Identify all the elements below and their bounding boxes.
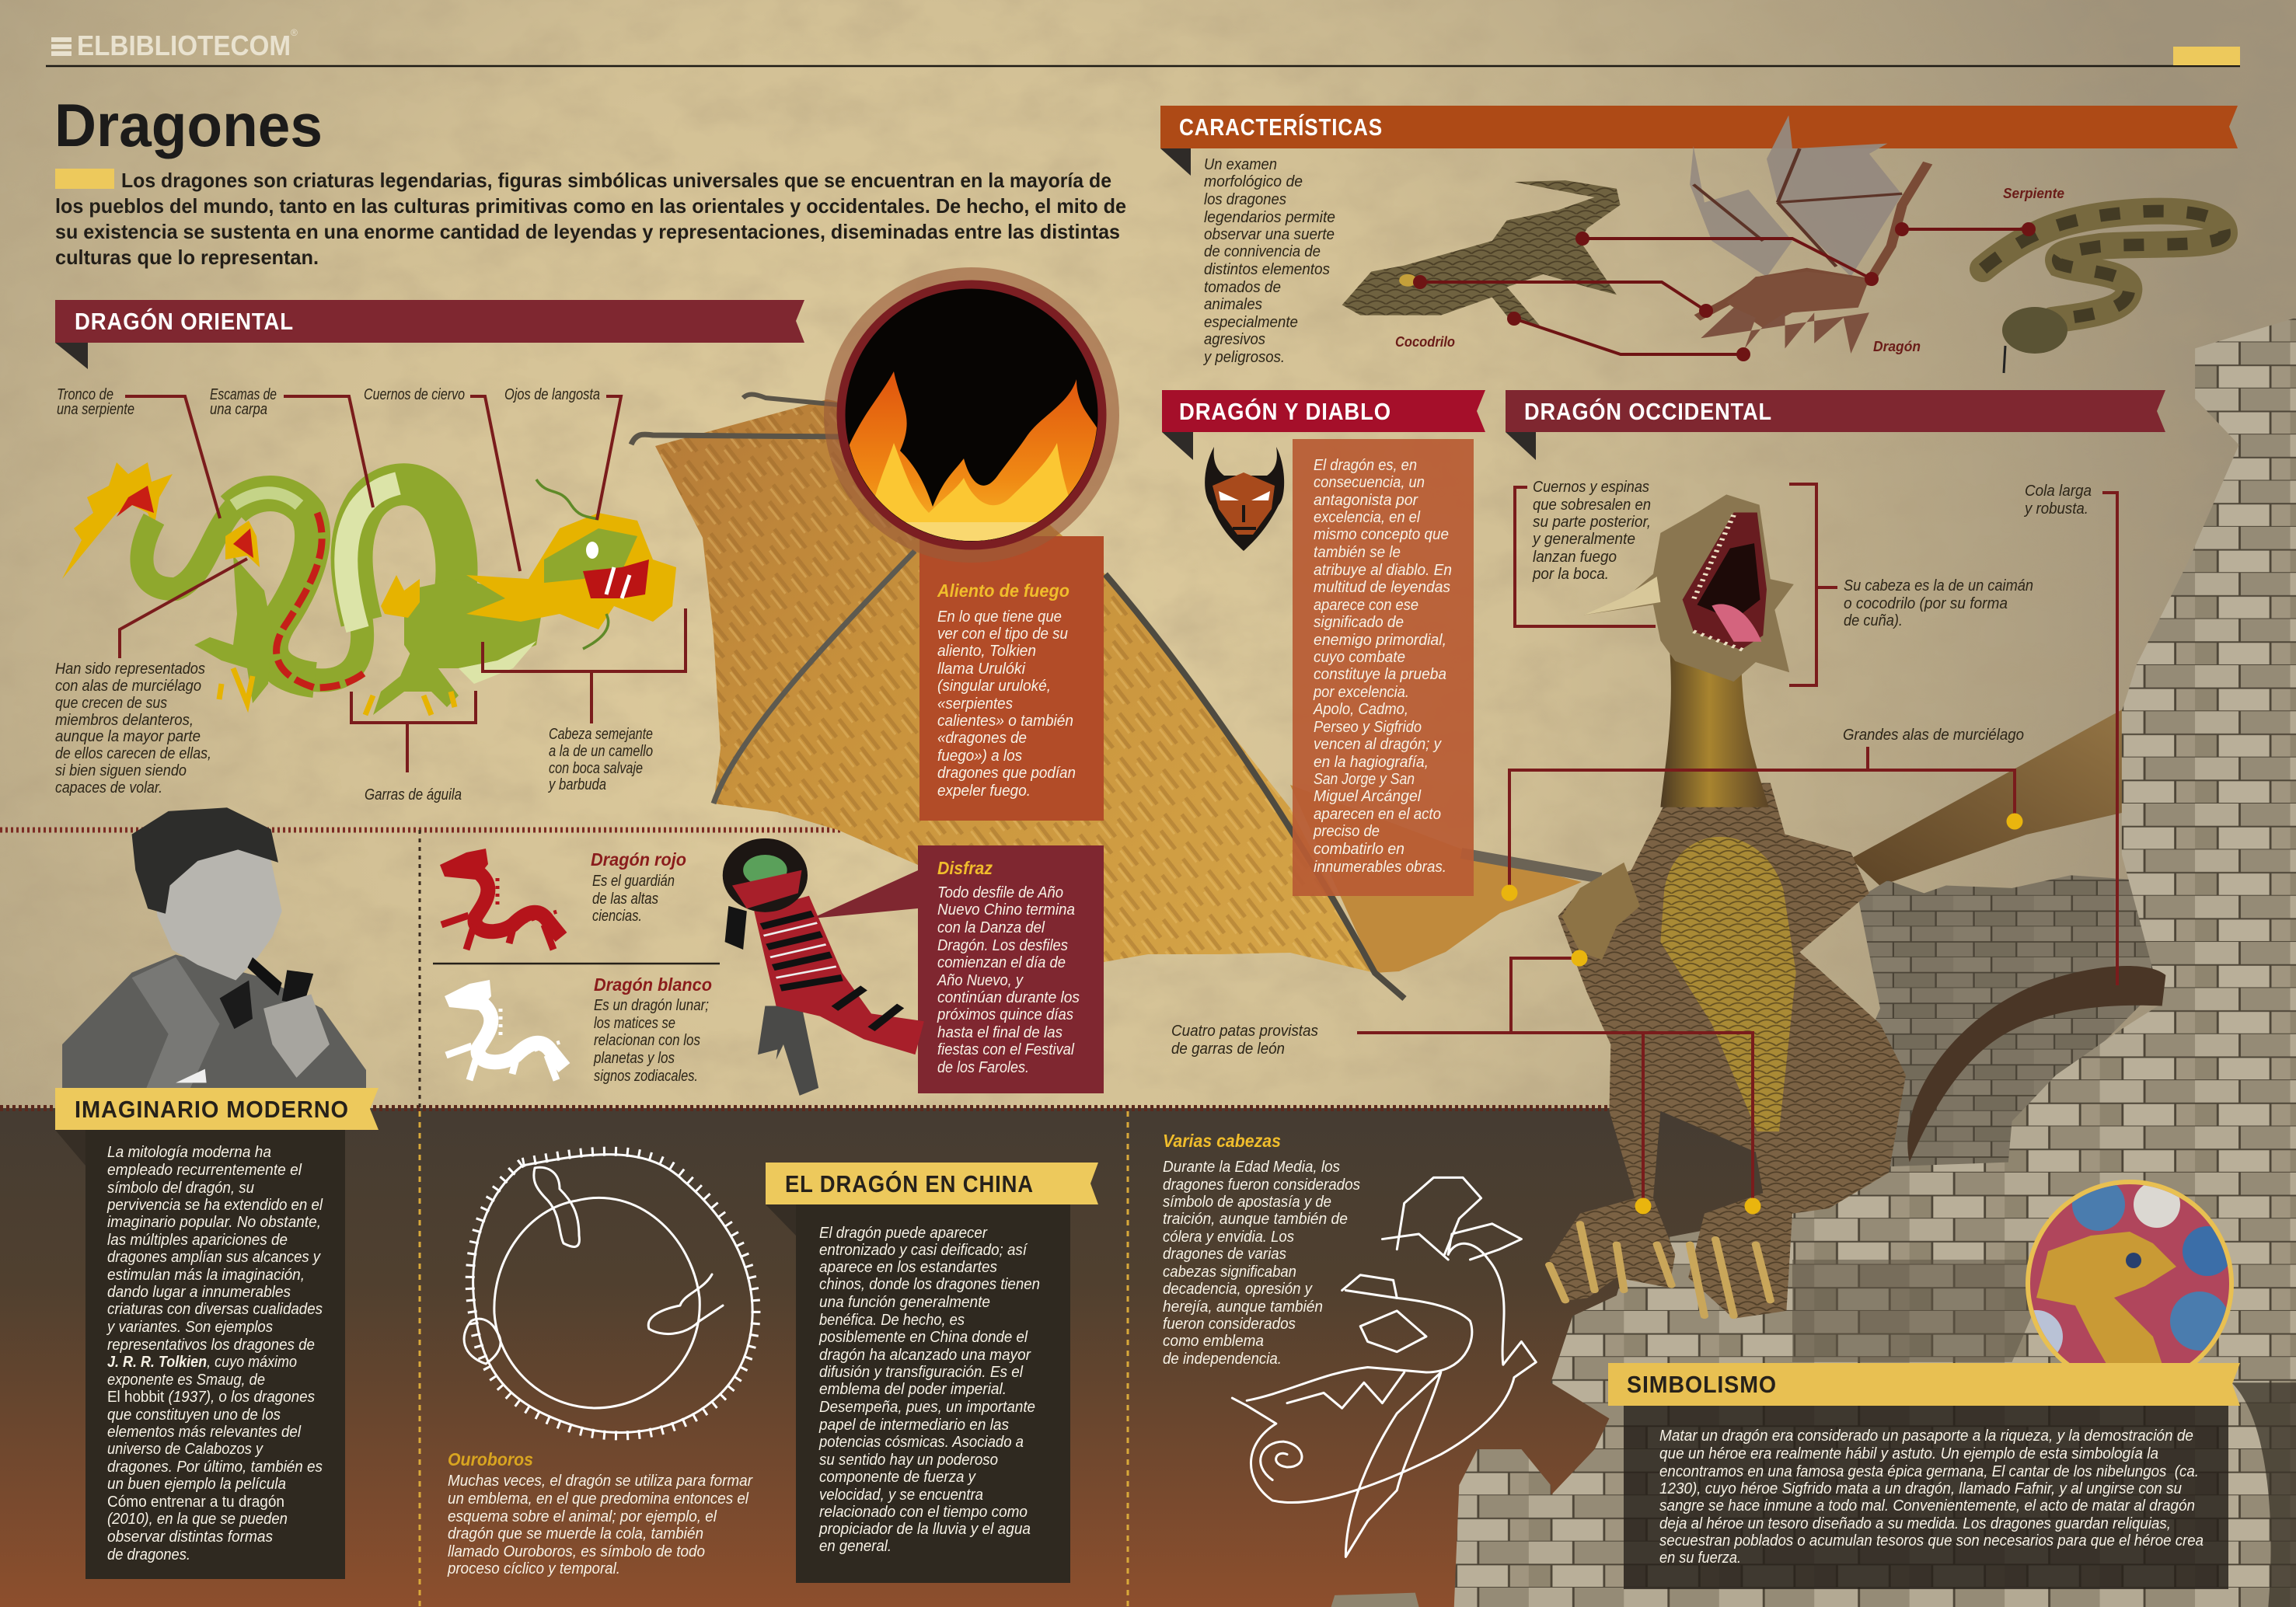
banner and box: imaginario moderno: J. R. R. Tolkien, cuyo máximo <box>107 1354 297 1371</box>
panel: dragón y diablo: por excelencia. <box>1313 684 1409 701</box>
panel: disfraz: de los Faroles. <box>937 1059 1029 1076</box>
panel: aliento de fuego: ver con el tipo de su <box>937 626 1068 643</box>
características text: animales <box>1204 296 1262 313</box>
oriental dragon callouts: Cuernos de ciervo <box>364 386 465 403</box>
panel: aliento de fuego: Aliento de fuego <box>937 580 1069 601</box>
banner and box: el dragón en china: en general. <box>819 1538 892 1555</box>
panel: dragón y diablo: DRAGÓN Y DIABLO <box>1179 397 1391 425</box>
tail <box>1907 966 2165 1163</box>
varias cabezas text: cólera y envidia. Los <box>1163 1229 1294 1246</box>
banner and box: imaginario moderno: (2010), en la que se pueden <box>107 1511 288 1528</box>
banner and box: imaginario moderno: las múltiples apariciones de <box>107 1232 288 1249</box>
características leader lines <box>1395 186 2064 361</box>
panel: dragón y diablo: innumerables obras. <box>1314 859 1446 876</box>
banner and box: simbolismo <box>1608 1178 2240 1589</box>
panel: dragón y diablo: San Jorge y San <box>1314 771 1415 788</box>
panel: aliento de fuego: dragones que podían <box>937 765 1076 782</box>
panel: disfraz: hasta el final de las <box>937 1024 1063 1041</box>
panel: dark lower band <box>0 1108 2296 1607</box>
logo: ELBIBLIOTECOM <box>77 30 291 61</box>
western dragon callouts: o cocodrilo (por su forma <box>1844 595 2008 612</box>
banner and box: el dragón en china: componente de fuerza y <box>819 1469 976 1486</box>
panel: dragón y diablo: Perseo y Sigfrido <box>1314 719 1422 736</box>
western dragon callouts <box>1171 479 2117 1214</box>
características text: morfológico de <box>1204 173 1303 190</box>
fire halo and ring <box>824 267 1119 563</box>
raised claw <box>1561 863 1640 960</box>
page tab <box>2173 47 2240 65</box>
right wing <box>1851 699 2176 886</box>
banner and box: simbolismo: sangre se hace inmune a todo mal. Convenientemente, el acto de matar al dragón <box>1659 1497 2195 1515</box>
oriental dragon callouts: una carpa <box>210 401 267 418</box>
wall shade <box>1792 1260 2056 1362</box>
red dragon icon <box>440 849 561 950</box>
dragon types text: Dragón blanco <box>594 974 712 995</box>
banner and box: el dragón en china: entronizado y casi deificado; así <box>819 1242 1028 1259</box>
banner and box: imaginario moderno: criaturas con diversas cualidades <box>107 1301 323 1318</box>
photo: Tolkien <box>62 807 366 1088</box>
castle masonry <box>1331 318 2296 1607</box>
banner and box: el dragón en china: posiblemente en China donde el <box>818 1329 1028 1346</box>
banner and box: el dragón en china: su sentido hay un poderoso <box>819 1452 998 1469</box>
western dragon callouts: por la boca. <box>1532 566 1609 583</box>
ouroboros illustration <box>464 1152 755 1435</box>
oriental dragon callouts: que crecen de sus <box>55 695 167 712</box>
características text: agresivos <box>1204 331 1265 348</box>
legs and claws <box>194 556 272 703</box>
western dragon callouts: Cuatro patas provistas <box>1171 1023 1318 1040</box>
intro text: culturas que lo representan. <box>55 246 319 269</box>
medallion <box>2026 1180 2234 1363</box>
varias cabezas text: como emblema <box>1163 1333 1264 1350</box>
oriental dragon callouts: Ojos de langosta <box>504 386 600 403</box>
banner and box: simbolismo: Matar un dragón era considerado un pasaporte a la riqueza, y la demostración de <box>1659 1427 2193 1445</box>
varias cabezas text: Durante la Edad Media, los <box>1163 1159 1340 1176</box>
características text: especialmente <box>1204 314 1298 331</box>
panel: dragón y diablo: excelencia, en el <box>1314 509 1421 526</box>
banner and box: imaginario moderno: universo de Calabozos y <box>107 1441 263 1458</box>
panel: dragón y diablo: combatirlo en <box>1314 841 1404 858</box>
varias cabezas text: símbolo de apostasía y de <box>1163 1194 1331 1211</box>
varias cabezas text: decadencia, opresión y <box>1163 1281 1313 1298</box>
panel: disfraz: Dragón. Los desfiles <box>937 937 1068 954</box>
características text: los dragones <box>1204 191 1286 208</box>
banner and box: el dragón en china: El dragón puede aparecer <box>819 1225 988 1242</box>
body <box>141 484 456 680</box>
icon: devil head <box>1205 447 1284 551</box>
western dragon callouts: que sobresalen en <box>1533 497 1651 514</box>
banner and box: imaginario moderno: pervivencia se ha extendido en el <box>106 1197 323 1214</box>
panel: dragón y diablo <box>1162 390 1485 896</box>
dragon types text: los matices se <box>594 1015 675 1032</box>
banner: características: CARACTERÍSTICAS <box>1179 113 1383 141</box>
oriental dragon callouts: y barbuda <box>547 776 606 793</box>
western dragon callouts: de cuña). <box>1844 612 1903 629</box>
intro text: los pueblos del mundo, tanto en las culturas primitivas como en las orientales y occidentales. De hecho, el mito de <box>55 194 1126 218</box>
banner and box: imaginario moderno: símbolo del dragón, su <box>107 1180 254 1197</box>
banner and box: simbolismo: 1230), cuyo héroe Sigfrido mata a un dragón, llamado Fafnir, y al ungirse con su <box>1659 1480 2182 1497</box>
ouroboros text: Muchas veces, el dragón se utiliza para formar <box>448 1473 753 1490</box>
western dragon callouts: su parte posterior, <box>1533 514 1651 531</box>
banner and box: simbolismo: deja al héroe un tesoro diseñado a su medida. Los dragones guardan reliquias, <box>1659 1515 2171 1532</box>
características text: de connivencia de <box>1204 243 1321 260</box>
panel: dragón y diablo: enemigo primordial, <box>1314 632 1446 649</box>
banner and box: imaginario moderno: dragones. Por último, también es <box>107 1459 323 1476</box>
dragon types text: de las altas <box>592 891 658 908</box>
panel: disfraz: con la Danza del <box>937 919 1045 936</box>
panel: disfraz: fiestas con el Festival <box>937 1041 1075 1058</box>
banner: dragón oriental: DRAGÓN ORIENTAL <box>75 307 294 335</box>
ouroboros text: Ouroboros <box>448 1449 533 1469</box>
panel: dragón y diablo: mismo concepto que <box>1314 526 1449 543</box>
oriental dragon callouts: Garras de águila <box>365 786 462 804</box>
banner and box: imaginario moderno: exponente es Smaug, de <box>107 1372 265 1389</box>
panel: aliento de fuego: «dragones de <box>937 730 1027 747</box>
panel: aliento de fuego <box>824 267 1119 821</box>
características leader lines: Serpiente <box>2003 186 2064 201</box>
banner and box: el dragón en china: potencias cósmicas. Asociado a <box>818 1434 1024 1451</box>
oriental dragon callouts: con boca salvaje <box>549 760 643 777</box>
small ruin <box>1454 1449 1555 1607</box>
banner and box: imaginario moderno: Cómo entrenar a tu dragón <box>107 1494 284 1511</box>
varias cabezas text: cabezas significaban <box>1163 1264 1296 1281</box>
banner and box: imaginario moderno: empleado recurrentemente el <box>107 1162 302 1179</box>
varias cabezas text <box>1163 1131 1360 1368</box>
panel: dragón y diablo: también se le <box>1314 544 1401 561</box>
dragon types text: Es un dragón lunar; <box>594 997 709 1014</box>
oriental dragon callouts: a la de un camello <box>549 743 653 760</box>
dragon types text: Es el guardián <box>592 873 675 890</box>
panel: disfraz: Disfraz <box>937 858 993 878</box>
banner and box: imaginario moderno: que constituyen uno de los <box>107 1407 281 1424</box>
banner: dragón occidental: DRAGÓN OCCIDENTAL <box>1524 397 1772 425</box>
head and mane <box>466 513 676 629</box>
banner and box: el dragón en china: velocidad, y se encuentra <box>819 1487 983 1504</box>
intro text <box>55 169 1126 269</box>
western dragon callouts: Cola larga <box>2025 483 2092 500</box>
banner and box: imaginario moderno: IMAGINARIO MODERNO <box>75 1096 349 1123</box>
foot claws <box>1549 1224 1771 1316</box>
banner and box: el dragón en china <box>766 1163 1098 1583</box>
banner and box: imaginario moderno: un buen ejemplo la película <box>107 1476 286 1493</box>
dragon types text: relacionan con los <box>594 1032 700 1049</box>
small dragon <box>1690 115 1928 354</box>
ouroboros text: llamado Ouroboros, es símbolo de todo <box>448 1543 705 1560</box>
banner and box: el dragón en china: benéfica. De hecho, es <box>819 1312 965 1329</box>
dragon types text: planetas y los <box>593 1050 675 1067</box>
logo: ® <box>291 27 298 38</box>
panel: dragón y diablo: Miguel Arcángel <box>1314 788 1422 805</box>
panel: disfraz <box>811 845 1104 1093</box>
panel: dragón y diablo: multitud de leyendas <box>1314 579 1450 596</box>
varias cabezas text: dragones fueron considerados <box>1163 1176 1360 1194</box>
banner and box: imaginario moderno: imaginario popular. No obstante, <box>107 1214 321 1231</box>
western dragon callouts: y robusta. <box>2023 500 2088 518</box>
panel: disfraz: próximos quince días <box>937 1006 1073 1023</box>
varias cabezas text: dragones de varias <box>1163 1246 1286 1263</box>
banner and box: imaginario moderno: El hobbit (1937), o los dragones <box>107 1389 315 1406</box>
panel: aliento de fuego: aliento, Tolkien <box>937 643 1036 660</box>
oriental dragon callouts: con alas de murciélago <box>55 678 201 695</box>
banner: dragón occidental <box>1506 390 2165 460</box>
banner and box: simbolismo: SIMBOLISMO <box>1627 1371 1777 1398</box>
intro text: su existencia se sustenta en una enorme cantidad de leyendas y representaciones, diseminadas entre las distintas <box>55 220 1120 243</box>
oriental dragon callouts: si bien siguen siendo <box>55 762 187 779</box>
main tower and base <box>1551 318 2296 1607</box>
varias cabezas text: de independencia. <box>1163 1351 1282 1368</box>
western dragon callouts: y generalmente <box>1531 531 1635 548</box>
panel: disfraz: Todo desfile de Año <box>937 884 1063 901</box>
panel: dragón y diablo: aparecen en el acto <box>1314 806 1441 823</box>
banner and box: el dragón en china: aparece en los estandartes <box>819 1259 997 1276</box>
oriental dragon callouts: de ellos carecen de ellas, <box>55 745 211 762</box>
características text: legendarios permite <box>1204 209 1335 226</box>
banner and box: imaginario moderno: elementos más relevantes del <box>107 1424 302 1441</box>
banner and box: el dragón en china: difusión y transfiguración. Es el <box>819 1364 1024 1381</box>
oriental dragon callouts: aunque la mayor parte <box>55 728 201 745</box>
banner and box: imaginario moderno <box>55 1088 379 1579</box>
big western dragon <box>1549 783 2165 1319</box>
dragon types text: Dragón rojo <box>591 849 686 870</box>
panel: dragón y diablo: vencen al dragón; y <box>1314 736 1442 753</box>
western dragon callouts: Su cabeza es la de un caimán <box>1844 577 2033 594</box>
banner and box: imaginario moderno: de dragones. <box>107 1546 190 1563</box>
panel: dragón y diablo: en la hagiografía, <box>1314 754 1429 771</box>
back wall <box>1792 875 2188 1214</box>
características text: Un examen <box>1204 156 1277 173</box>
ouroboros text: un emblema, en el que predomina entonces el <box>448 1490 749 1508</box>
banner and box: imaginario moderno: La mitología moderna ha <box>107 1144 271 1161</box>
banner and box: simbolismo: que un héroe era realmente hábil y astuto. Un ejemplo de esta simbología la <box>1659 1445 2158 1462</box>
panel: dragón y diablo: consecuencia, un <box>1314 474 1425 491</box>
varias cabezas text: herejía, aunque también <box>1163 1298 1323 1316</box>
paper texture <box>0 0 2296 1111</box>
banner and box: el dragón en china: una función generalmente <box>819 1294 990 1311</box>
panel: aliento de fuego: calientes» o también <box>937 713 1073 730</box>
banner and box: el dragón en china: Desempeña, pues, un importante <box>819 1399 1035 1416</box>
varias cabezas text: traición, aunque también de <box>1163 1211 1348 1228</box>
características text <box>1202 156 1335 366</box>
banner and box: el dragón en china: relacionado con el tiempo como <box>819 1504 1028 1521</box>
western dragon callouts: de garras de león <box>1171 1041 1285 1058</box>
banner and box: simbolismo: secuestran poblados o acumulan tesoros que son necesarios para que el héroe crea <box>1659 1532 2204 1549</box>
bat wing: left membrane <box>631 395 1601 999</box>
banner and box: imaginario moderno: dando lugar a innumerables <box>107 1284 291 1301</box>
banner and box: el dragón en china: papel de intermediario en las <box>818 1417 1009 1434</box>
panel: disfraz: Año Nuevo, y <box>937 972 1024 989</box>
panel: dragón y diablo: cuyo combate <box>1314 649 1405 666</box>
ouroboros text: proceso cíclico y temporal. <box>447 1560 620 1577</box>
banner and box: imaginario moderno: y variantes. Son ejemplos <box>106 1319 273 1336</box>
ouroboros text: dragón que se muerde la cola, también <box>448 1525 703 1543</box>
torso <box>404 579 544 668</box>
oriental dragon callouts: Cabeza semejante <box>549 726 653 743</box>
panel: disfraz: comienzan el día de <box>937 954 1066 971</box>
panel: aliento de fuego: llama Urulóki <box>937 661 1026 678</box>
ouroboros text <box>447 1449 753 1577</box>
banner and box: imaginario moderno: representativos los dragones de <box>107 1337 315 1354</box>
varias cabezas text: Varias cabezas <box>1163 1131 1281 1151</box>
icon: flames <box>849 371 1097 541</box>
intro text: Los dragones son criaturas legendarias, figuras simbólicas universales que se encuentran en la mayoría de <box>121 169 1111 192</box>
dragon types text: signos zodiacales. <box>594 1068 698 1085</box>
oriental dragon callouts: Escamas de <box>210 386 277 403</box>
western dragon callouts: Grandes alas de murciélago <box>1843 727 2024 744</box>
ouroboros text: esquema sobre el animal; por ejemplo, el <box>448 1508 717 1525</box>
tail flame <box>62 462 173 579</box>
oriental dragon callouts: Tronco de <box>57 386 113 403</box>
dragon types text <box>433 849 720 1085</box>
oriental dragon callouts: miembros delanteros, <box>55 712 194 729</box>
lion dance figure <box>723 838 924 1096</box>
western dragon callouts: Cuernos y espinas <box>1533 479 1649 496</box>
características leader lines: Cocodrilo <box>1395 334 1455 350</box>
dragon types text: ciencias. <box>592 908 642 925</box>
banner and box: simbolismo: en su fuerza. <box>1659 1549 1741 1567</box>
banner and box: el dragón en china: chinos, donde los dragones tienen <box>819 1276 1040 1293</box>
dragon neck and head <box>1583 494 1794 807</box>
panel: aliento de fuego: (singular uruloké, <box>937 678 1051 695</box>
panel: dragón y diablo: aparece con ese <box>1314 597 1418 614</box>
oriental dragon callouts: capaces de volar. <box>55 779 162 797</box>
oriental dragon callouts: una serpiente <box>57 401 134 418</box>
banner and box: el dragón en china: EL DRAGÓN EN CHINA <box>785 1170 1034 1197</box>
características text: distintos elementos <box>1204 261 1330 278</box>
banner and box: imaginario moderno: observar distintas formas <box>107 1529 273 1546</box>
green oriental dragon <box>62 462 676 715</box>
panel: dragón y diablo: constituye la prueba <box>1314 666 1446 683</box>
haunch and torso <box>1549 783 1906 1319</box>
panel: dragón y diablo: preciso de <box>1313 823 1380 840</box>
white dragon icon <box>445 980 564 1080</box>
características text: y peligrosos. <box>1202 349 1285 366</box>
características text: tomados de <box>1204 279 1281 296</box>
snake <box>1983 211 2224 373</box>
panel: disfraz: continúan durante los <box>937 989 1080 1006</box>
banner: dragón oriental <box>55 300 804 369</box>
banner and box: el dragón en china: propiciador de la lluvia y el agua <box>818 1521 1031 1538</box>
banner and box: imaginario moderno: estimulan más la imaginación, <box>107 1267 305 1284</box>
panel: dragón y diablo: significado de <box>1314 614 1404 631</box>
western dragon callouts: lanzan fuego <box>1533 549 1617 566</box>
banner and box: el dragón en china: emblema del poder imperial. <box>819 1381 1007 1398</box>
panel: dragón y diablo: atribuye al diablo. En <box>1314 562 1452 579</box>
oriental dragon callouts: Han sido representados <box>55 661 205 678</box>
crocodile <box>1342 180 1621 326</box>
características leader lines: Dragón <box>1873 339 1921 354</box>
panel: dragón y diablo: Apolo, Cadmo, <box>1313 701 1408 718</box>
panel: aliento de fuego: fuego») a los <box>937 748 1022 765</box>
panel: disfraz: Nuevo Chino termina <box>937 901 1075 919</box>
banner and box: simbolismo: encontramos en una famosa gesta épica germana, El cantar de los nibelungos (ca. <box>1659 1463 2199 1480</box>
panel: dragón y diablo: El dragón es, en <box>1314 457 1417 474</box>
varias cabezas text: fueron considerados <box>1163 1316 1296 1333</box>
características text: observar una suerte <box>1204 226 1335 243</box>
hydra illustration <box>1232 1177 1536 1556</box>
panel: aliento de fuego: «serpientes <box>937 695 1013 713</box>
banner and box: el dragón en china: dragón ha alcanzado una mayor <box>819 1347 1031 1364</box>
title: Dragones <box>54 91 323 159</box>
panel: dragón y diablo: antagonista por <box>1314 492 1418 509</box>
panel: aliento de fuego: expeler fuego. <box>937 783 1031 800</box>
flame tufts <box>225 521 260 567</box>
oriental dragon callouts <box>55 386 686 804</box>
banner and box: imaginario moderno: dragones amplían sus alcances y <box>107 1249 321 1266</box>
banner: características <box>1160 106 2238 176</box>
chest plates <box>1660 837 1796 1131</box>
panel: aliento de fuego: En lo que tiene que <box>937 608 1062 626</box>
